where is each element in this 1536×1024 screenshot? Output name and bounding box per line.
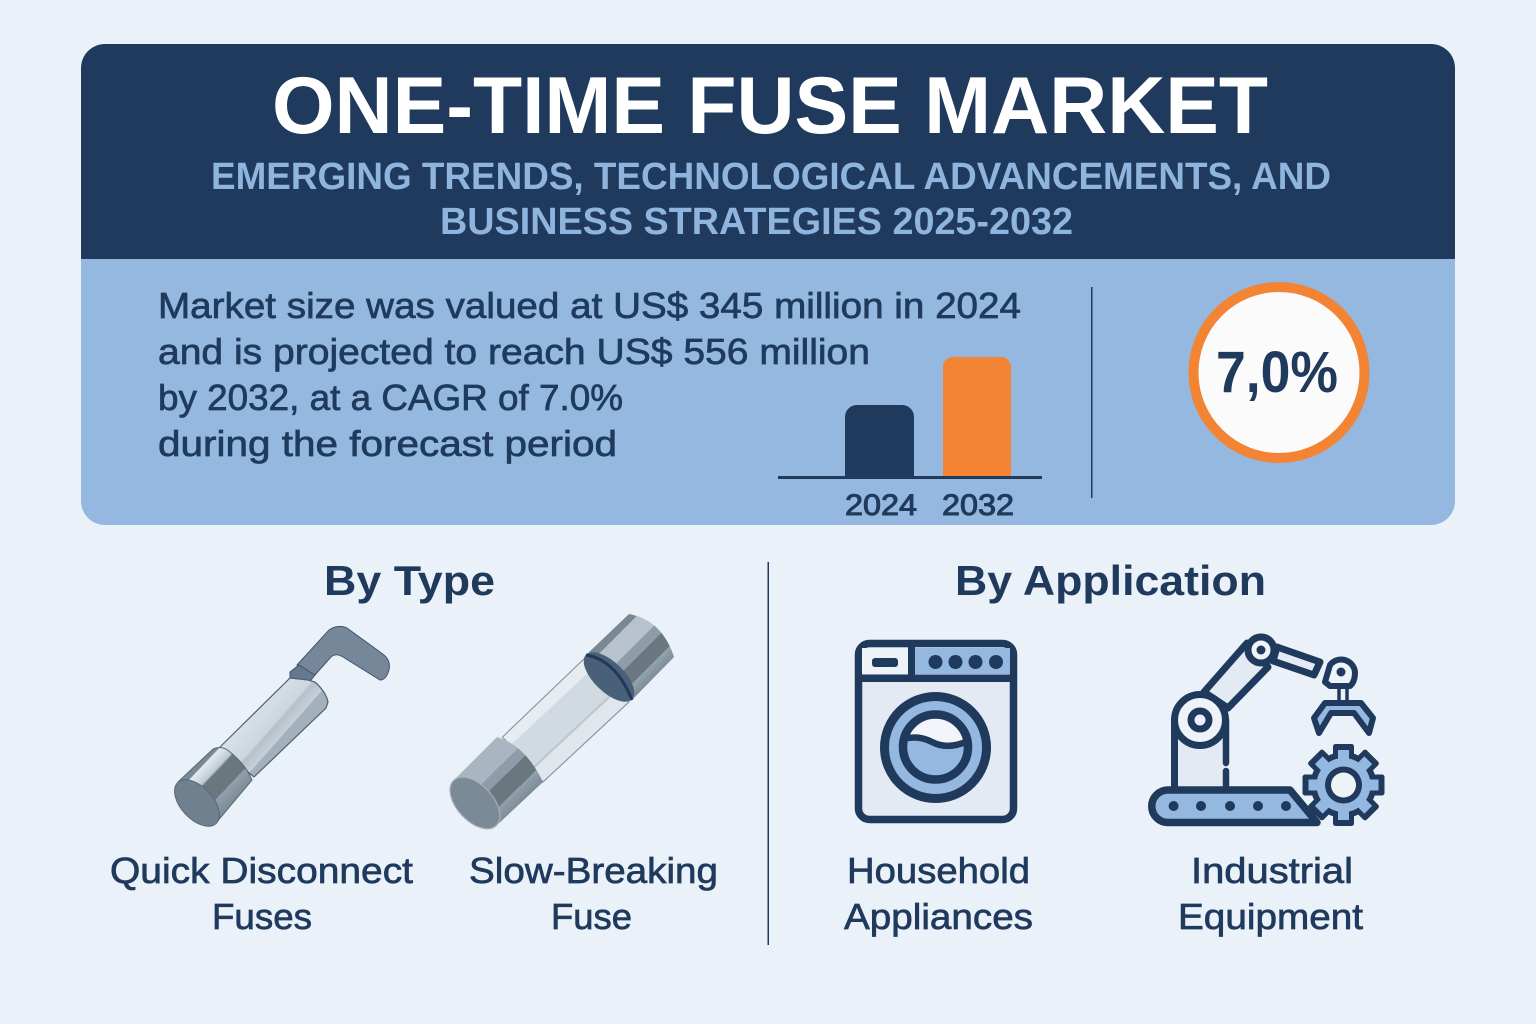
market size description: Market size was valued at US$ 345 million in 2024 <box>158 285 1021 326</box>
market size description: and is projected to reach US$ 556 million <box>158 331 870 372</box>
label: Household Appliances: Household <box>847 850 1030 891</box>
label: Quick Disconnect Fuses: Fuses <box>212 896 312 937</box>
market size description: during the forecast period <box>158 423 617 464</box>
callout: CAGR badge: 7,0% <box>1216 340 1338 405</box>
market size description <box>158 285 1021 464</box>
market size description: by 2032, at a CAGR of 7.0% <box>158 377 623 418</box>
subtitle: EMERGING TRENDS, TECHNOLOGICAL ADVANCEMENTS, AND <box>211 156 1331 198</box>
axis label: 2032: 2032 <box>942 489 1014 522</box>
title: ONE-TIME FUSE MARKET <box>272 61 1268 151</box>
axis label: 2024: 2024 <box>845 489 917 522</box>
label: Industrial Equipment: Equipment <box>1178 896 1363 937</box>
label: Industrial Equipment: Industrial <box>1191 850 1353 891</box>
label: Household Appliances: Appliances <box>844 896 1033 937</box>
chart axis <box>778 476 1042 479</box>
heading: By Application: By Application <box>955 557 1266 604</box>
bar chart: 2024 vs 2032 <box>778 357 1042 522</box>
label: Industrial Equipment <box>1178 850 1363 937</box>
bar: 2024 <box>845 405 914 477</box>
label: Slow-Breaking Fuse: Slow-Breaking <box>469 850 718 891</box>
subtitle <box>211 156 1331 243</box>
label: Quick Disconnect Fuses <box>110 850 413 937</box>
panel: market summary card <box>81 44 1455 525</box>
panel: lower blue market size band <box>81 255 1455 525</box>
label: Slow-Breaking Fuse <box>469 850 718 937</box>
label: Household Appliances <box>844 850 1033 937</box>
icon: slow-breaking fuse <box>441 614 674 838</box>
subtitle: BUSINESS STRATEGIES 2025-2032 <box>440 201 1073 243</box>
icon: industrial robot arm with conveyor and gear <box>1152 637 1384 826</box>
icon: quick disconnect fuse <box>166 626 389 834</box>
heading: By Type: By Type <box>324 557 495 604</box>
label: Quick Disconnect Fuses: Quick Disconnect <box>110 850 413 891</box>
bar: 2032 <box>943 357 1011 477</box>
callout: CAGR badge <box>1194 287 1364 458</box>
icon: washing machine <box>858 644 1014 820</box>
label: Slow-Breaking Fuse: Fuse <box>551 896 632 937</box>
panel: navy title banner <box>81 44 1455 259</box>
